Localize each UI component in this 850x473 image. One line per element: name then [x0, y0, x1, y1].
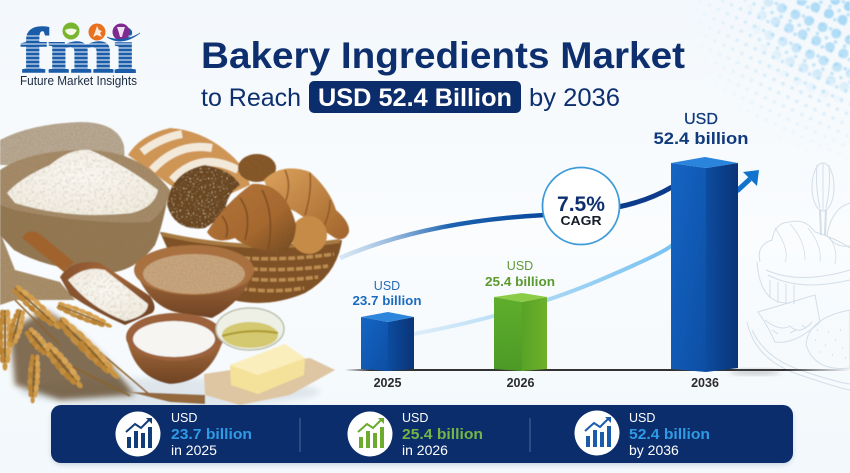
growth arrow	[737, 170, 759, 191]
summary text 2036: by 2036	[629, 442, 679, 458]
sand bowl	[134, 245, 254, 318]
flour mound	[7, 150, 158, 215]
hanging burlap and table cloth	[0, 232, 75, 305]
wheat bundle	[0, 283, 150, 404]
subtitle	[201, 81, 620, 113]
summary text 2036: USD	[629, 411, 655, 425]
summary text 2026: 25.4 billion	[402, 426, 483, 443]
summary item 2026	[348, 411, 483, 458]
label 2026 value: 25.4 billion	[485, 274, 555, 289]
back bun	[238, 154, 276, 182]
wooden scoop	[22, 231, 155, 325]
summary text 2026: USD	[402, 411, 428, 425]
icon: rising bars 2026	[348, 412, 392, 456]
oil dish	[216, 308, 284, 350]
butter block	[230, 344, 305, 394]
subtitle lead: to Reach	[201, 84, 301, 112]
summary text 2025	[171, 411, 252, 458]
label 2036 value: USD	[684, 111, 718, 128]
summary item 2025	[116, 411, 252, 458]
summary band	[51, 405, 793, 464]
label 2036 value	[654, 111, 748, 148]
logo letters fmi: fmi	[21, 15, 136, 86]
label 2026 value: USD	[507, 259, 533, 273]
bar 2026	[494, 293, 547, 371]
logo badge purple	[112, 24, 130, 40]
icon: rising bars 2036	[574, 410, 620, 456]
summary text 2025: USD	[171, 411, 197, 425]
summary text 2036: 52.4 billion	[629, 426, 710, 443]
logo badge orange	[88, 24, 106, 40]
subtitle highlight text: USD 52.4 Billion	[318, 84, 512, 112]
bar 2025	[361, 312, 414, 371]
logo badge green	[62, 22, 80, 40]
chart: market growth bars	[340, 111, 850, 390]
sugar bowl	[126, 313, 224, 384]
summary text 2025: 23.7 billion	[171, 426, 252, 443]
croissant right	[264, 168, 349, 239]
label 2036 value: 52.4 billion	[654, 130, 748, 148]
bread basket	[160, 232, 342, 303]
striped loaf	[128, 128, 250, 205]
seeded bun	[167, 165, 240, 229]
halftone dots pattern	[704, 0, 850, 146]
CAGR badge: 7.5%	[557, 193, 605, 216]
label 2026 value	[485, 259, 555, 289]
CAGR badge: CAGR	[560, 213, 602, 228]
summary item 2036	[574, 410, 710, 458]
summary text 2026	[402, 411, 483, 458]
subtitle highlight pill	[309, 81, 521, 113]
summary text 2036	[629, 411, 710, 458]
bar 2036	[671, 157, 738, 372]
flour sack	[0, 150, 170, 273]
title: Bakery Ingredients Market	[201, 35, 685, 76]
subtitle tail: by 2036	[529, 84, 620, 112]
label 2026 year: 2026	[507, 376, 534, 390]
parchment paper	[130, 358, 335, 405]
table shadow	[20, 378, 320, 406]
growth curve dark	[340, 215, 545, 258]
summary text 2025: in 2025	[171, 442, 217, 458]
label 2025 value	[352, 279, 422, 308]
label 2025 year: 2025	[374, 376, 401, 390]
growth curve light	[414, 243, 673, 334]
sketch illustration: bakery line art	[747, 163, 850, 390]
icon: rising bars 2025	[116, 412, 160, 456]
label 2025 value: 23.7 billion	[352, 293, 422, 308]
photo: bakery ingredients	[0, 122, 349, 406]
round roll	[291, 216, 327, 254]
summary text 2026: in 2026	[402, 442, 448, 458]
CAGR badge	[542, 168, 620, 244]
logo tagline: Future Market Insights	[20, 74, 137, 88]
croissant front	[207, 184, 296, 253]
burlap cloth	[0, 122, 125, 165]
axis baseline	[345, 369, 850, 371]
label 2025 value: USD	[374, 279, 400, 293]
label 2036 year: 2036	[691, 376, 719, 390]
logo: Future Market Insights	[18, 15, 140, 88]
